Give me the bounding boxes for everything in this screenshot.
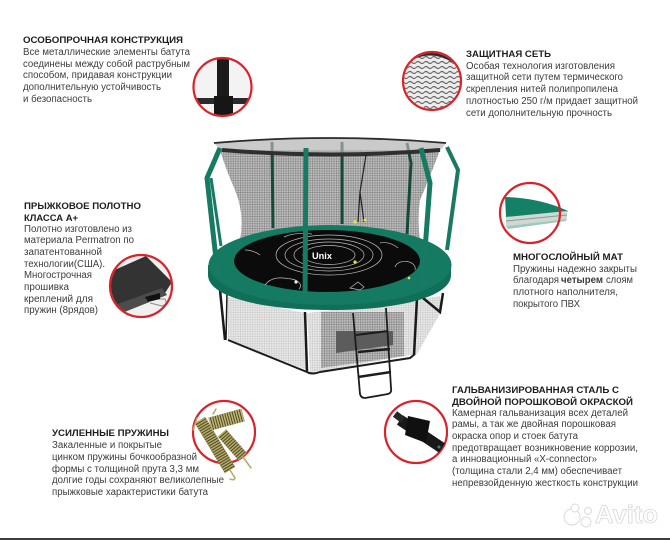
icon: stitched fabric xyxy=(110,255,172,317)
description: запатентованной xyxy=(24,247,102,258)
description: (толщина стали 2,4 мм) обеспечивает xyxy=(452,465,622,477)
top ring xyxy=(214,138,446,154)
icon: X-connector xyxy=(385,401,447,463)
description: сети дополнительную прочность xyxy=(466,108,612,119)
upper safety net xyxy=(220,150,440,240)
description xyxy=(452,408,638,489)
description: покрытого ПВХ xyxy=(513,299,580,310)
description xyxy=(24,224,134,316)
lower safety net enclosure xyxy=(228,296,441,374)
description: Камерная гальванизация всех деталей xyxy=(452,408,628,419)
description: предотвращает возникновение коррозии, xyxy=(452,443,638,454)
description: плотностью 250 г/м придает защитной xyxy=(466,96,638,107)
description: долгие годы сохраняют великолепные xyxy=(52,475,224,486)
description: материала Permatron по xyxy=(24,235,134,246)
description xyxy=(52,440,224,498)
description: Особая технология изготовления xyxy=(466,60,615,72)
description: Пружины надежно закрыты xyxy=(513,264,637,275)
watermark: Avito: Avito xyxy=(595,501,658,529)
description: благодаря xyxy=(513,274,559,286)
description: защитной сети путем термического xyxy=(466,72,623,83)
heading: ПРЫЖКОВОЕ ПОЛОТНО xyxy=(24,201,142,212)
description: скрепления нитей полипропилена xyxy=(466,84,618,95)
heading: ДВОЙНОЙ ПОРОШКОВОЙ ОКРАСКОЙ xyxy=(452,396,633,408)
heading: КЛАССА А+ xyxy=(24,213,78,224)
entry rope xyxy=(358,155,366,222)
icon: socket joint xyxy=(192,56,253,118)
feature: multilayer pad xyxy=(500,183,637,310)
feature: safety net xyxy=(400,49,638,119)
description: дополнительную устойчивость xyxy=(23,82,161,93)
icon: net weave xyxy=(402,50,462,112)
feature: reinforced springs xyxy=(52,401,255,498)
brand logo: Unix xyxy=(312,251,333,262)
rear frame poles xyxy=(272,142,411,234)
description: прошивка xyxy=(24,282,69,293)
jumping surface xyxy=(234,230,420,292)
heading: ГАЛЬВАНИЗИРОВАННАЯ СТАЛЬ С xyxy=(452,385,619,396)
description: прыжковые характеристики батута xyxy=(52,486,208,498)
description xyxy=(466,60,638,119)
description: цинком пружины бочкообразной xyxy=(52,451,197,463)
description: формы с толщиной прута 3,3 мм xyxy=(52,463,199,475)
description: технологии(США). xyxy=(24,259,105,270)
feature: galvanized steel xyxy=(385,385,638,489)
heading: ЗАЩИТНАЯ СЕТЬ xyxy=(466,49,551,60)
rope ends xyxy=(353,218,366,224)
description: способом, придавая конструкции xyxy=(23,69,172,81)
description: Все металлические элементы батута xyxy=(23,46,190,58)
description xyxy=(513,264,637,310)
description: непревзойденную жесткость конструкции xyxy=(452,478,638,489)
description: и безопасность xyxy=(23,93,92,105)
feature: jumping surface xyxy=(24,201,172,317)
frame legs xyxy=(220,290,443,371)
description xyxy=(23,46,190,105)
description: а инновационный «X-connector» xyxy=(452,454,597,465)
heading: ОСОБОПРОЧНАЯ КОНСТРУКЦИЯ xyxy=(23,35,183,46)
front frame poles xyxy=(207,147,458,303)
description: окраска опор и стоек батута xyxy=(452,430,578,442)
heading: УСИЛЕННЫЕ ПРУЖИНЫ xyxy=(52,428,169,439)
icon: springs xyxy=(193,401,255,480)
heading xyxy=(24,201,142,224)
description: креплений для xyxy=(24,294,93,305)
mat padding xyxy=(208,225,452,310)
description: слоям xyxy=(606,275,633,286)
description: соединены между собой раструбным xyxy=(23,58,190,70)
description: Полотно изготовлено из xyxy=(24,224,132,235)
icon: pad cross-section xyxy=(500,183,568,243)
description: Многострочная xyxy=(24,270,92,281)
description: четырем xyxy=(561,275,603,286)
feature: reinforced structure xyxy=(23,35,255,120)
description: рамы, а так же двойная порошковая xyxy=(452,419,616,430)
trampoline illustration xyxy=(207,138,458,398)
description: плотного наполнителя, xyxy=(513,287,618,298)
ladder xyxy=(353,308,391,398)
heading xyxy=(452,385,633,408)
description: пружин (8рядов) xyxy=(24,305,98,316)
watermark: Avito xyxy=(564,501,658,529)
description: Закаленные и покрытые xyxy=(52,440,162,451)
heading: МНОГОСЛОЙНЫЙ МАТ xyxy=(513,251,623,263)
